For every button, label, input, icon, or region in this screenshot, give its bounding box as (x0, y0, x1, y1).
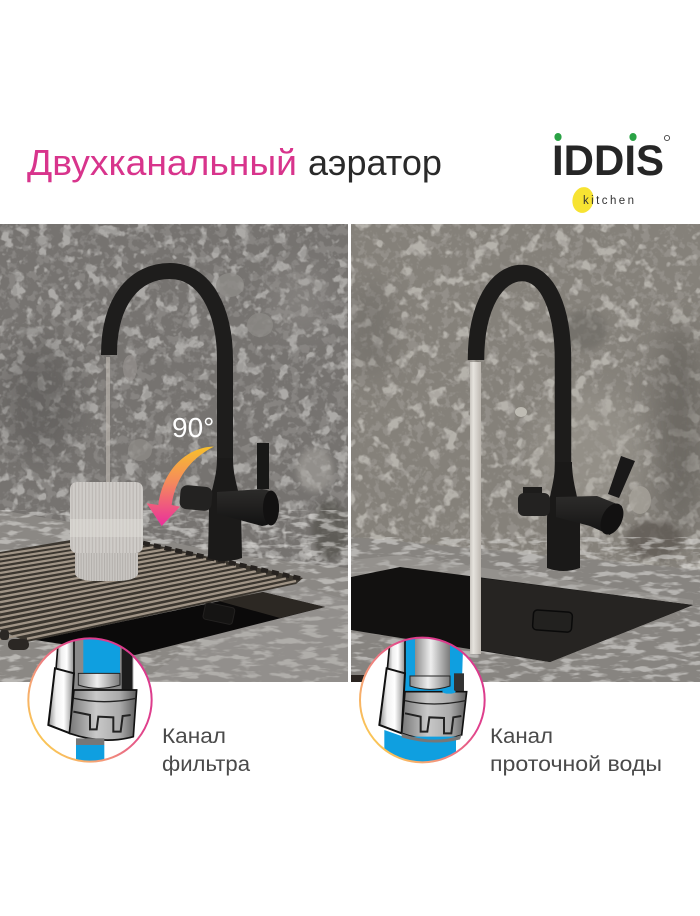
panel: left photo, filter channel (0, 224, 348, 682)
caption: tap water channel: проточной воды (490, 752, 662, 776)
logo: IDDIS kitchen (552, 133, 670, 215)
stone counter top (0, 510, 348, 682)
panel: right photo, tap water channel (346, 224, 700, 682)
title: аэратор (308, 142, 442, 183)
caption: filter channel: Канал (162, 724, 226, 748)
caption: tap water channel (490, 724, 662, 776)
stone counter and sink surround (351, 537, 700, 682)
logo: IDDIS kitchen: IDDIS (552, 137, 664, 185)
label: 90°: 90° (172, 412, 214, 443)
sink (35, 592, 325, 655)
title: Двухканальный (27, 142, 297, 183)
water stream (106, 357, 110, 485)
faucet (109, 271, 279, 561)
glass (70, 482, 143, 581)
logo: IDDIS kitchen: kitchen (583, 195, 634, 207)
caption: filter channel: фильтра (162, 752, 250, 776)
caption: tap water channel: Канал (490, 724, 553, 748)
inset: filter channel cutaway (28, 637, 152, 765)
stone wall (346, 224, 700, 570)
title (27, 142, 442, 183)
stone wall (0, 224, 348, 568)
drying rack (0, 534, 303, 650)
arrow: 90 degree rotation (147, 447, 214, 526)
faucet (476, 273, 635, 571)
water stream (470, 362, 481, 654)
sink (351, 567, 693, 662)
caption: filter channel (162, 724, 250, 776)
inset: tap water channel cutaway (360, 637, 485, 763)
